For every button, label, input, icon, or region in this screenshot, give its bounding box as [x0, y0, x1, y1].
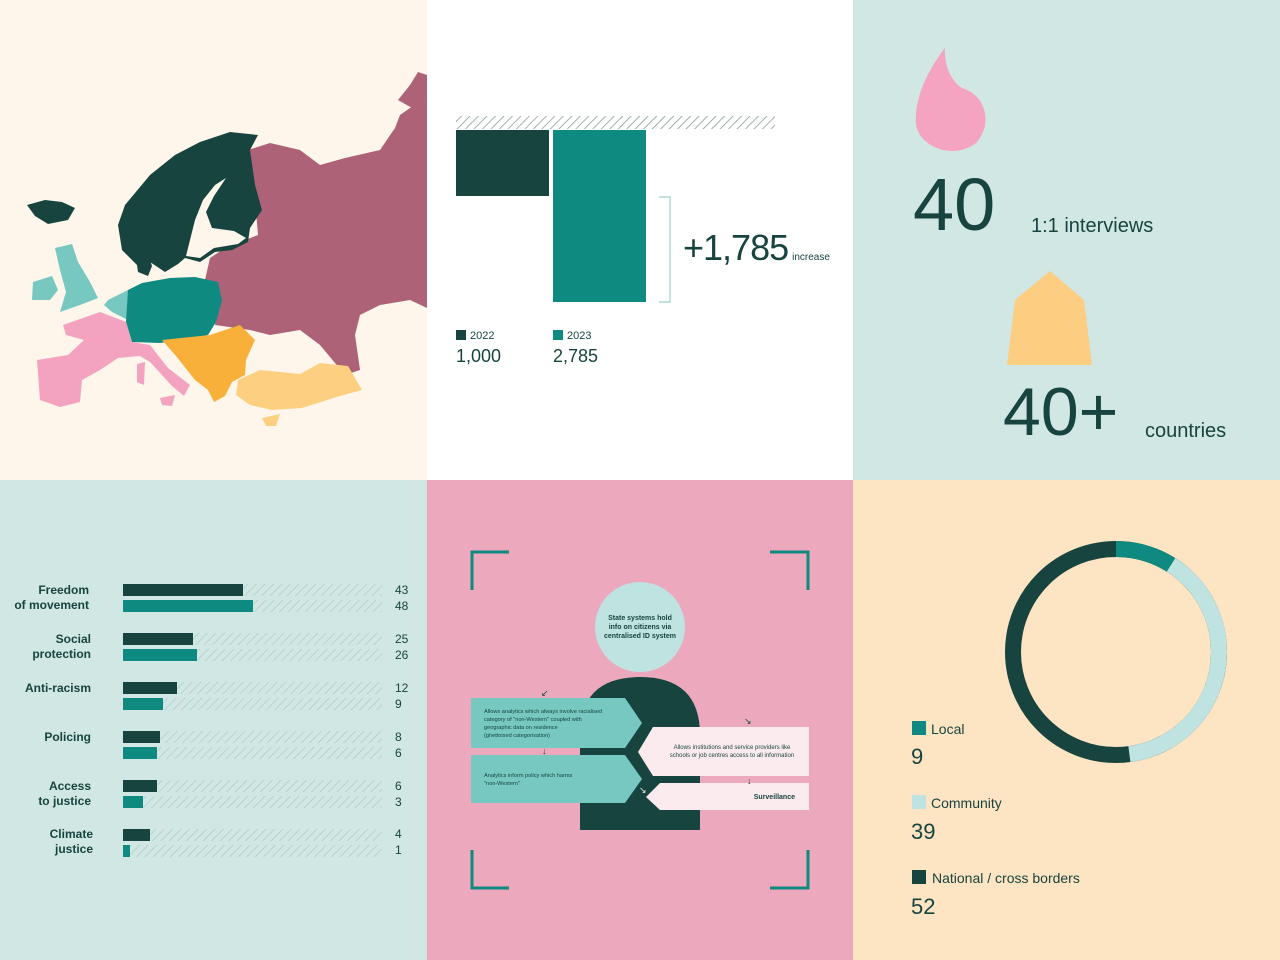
- panel: key stats: [853, 0, 1280, 480]
- row: freedom of movement: Freedom: [38, 583, 89, 597]
- row: access to justice: 6: [395, 779, 402, 793]
- panel: ID system diagram: [427, 480, 853, 960]
- legend: national: [911, 870, 1080, 919]
- icon: yellow house: [1007, 271, 1092, 365]
- row: freedom of movement: [14, 583, 409, 613]
- map: central europe: [126, 277, 222, 343]
- row: policing: 8: [395, 730, 402, 744]
- donut: [1013, 549, 1219, 755]
- bar 2022: [456, 130, 549, 196]
- row: anti-racism: Anti-racism: [25, 681, 91, 695]
- box: analytics racialised: [471, 698, 642, 748]
- legend: national: National / cross borders: [932, 870, 1080, 886]
- box: analytics racialised: (ghettoised categorisation): [484, 733, 550, 739]
- row: climate justice: 4: [395, 827, 402, 841]
- bracket: [659, 197, 670, 302]
- box: institutions access: Allows institutions and service providers like: [674, 745, 791, 751]
- row: access to justice: 3: [395, 795, 402, 809]
- box: analytics racialised: category of "non-Western" coupled with: [484, 717, 582, 723]
- row: policing: 6: [395, 746, 402, 760]
- row: anti-racism: [25, 681, 409, 711]
- legend: local: [911, 721, 964, 769]
- row: climate justice: [50, 827, 402, 857]
- stat: 40 interviews: [913, 163, 1153, 246]
- legend 2022: 2022: [470, 330, 494, 342]
- box: analytics racialised: geographic data on residence: [484, 725, 558, 731]
- hatched cap: [456, 116, 775, 129]
- head: state systems: State systems hold: [608, 615, 672, 622]
- row: climate justice: Climate: [50, 827, 93, 841]
- legend: national: 52: [911, 894, 935, 919]
- legend 2023: 2,785: [553, 346, 598, 366]
- icon: pink quote mark: [916, 48, 985, 151]
- arrows: ↘: [639, 785, 647, 795]
- panel: europe map: [0, 0, 427, 480]
- row: climate justice: justice: [54, 842, 93, 856]
- arrows: ↓: [747, 776, 752, 786]
- arrows: [541, 688, 752, 795]
- arrows: ↘: [744, 716, 752, 726]
- row: anti-racism: 9: [395, 697, 402, 711]
- box: institutions access: schools or job centres access to all information: [670, 753, 794, 759]
- box: analytics inform policy: Analytics inform policy which harms: [484, 773, 572, 779]
- legend 2023: 2023: [567, 330, 591, 342]
- box: analytics inform policy: [471, 755, 642, 803]
- row: social protection: [32, 632, 409, 662]
- row: access to justice: Access: [49, 779, 91, 793]
- map: russia/east region: [205, 100, 427, 375]
- row: social protection: 25: [395, 632, 409, 646]
- box: surveillance: [646, 783, 809, 810]
- head: state systems: [595, 582, 685, 672]
- panel: theme bar chart: [0, 480, 427, 960]
- row: access to justice: [38, 779, 402, 809]
- legend: community: Community: [931, 795, 1002, 811]
- stat: 40+ countries: [1003, 374, 1226, 450]
- panel: growth bar chart: [427, 0, 853, 480]
- figure body: [580, 677, 700, 830]
- row: climate justice: 1: [395, 843, 402, 857]
- row: social protection: protection: [32, 647, 91, 661]
- map: uk and ireland: [55, 244, 98, 312]
- row: anti-racism: 12: [395, 681, 409, 695]
- legend: local: 9: [911, 744, 923, 769]
- row: social protection: 26: [395, 648, 409, 662]
- map: balkans: [162, 325, 255, 402]
- row: freedom of movement: 43: [395, 583, 409, 597]
- map: nordic region: [118, 132, 262, 272]
- legend: community: 39: [911, 819, 935, 844]
- stat: 40 interviews: 40: [913, 163, 995, 246]
- row: policing: [44, 730, 402, 760]
- box: analytics inform policy: "non-Western": [484, 781, 520, 787]
- map: western/southern europe: [37, 312, 190, 407]
- row: social protection: Social: [56, 632, 91, 646]
- row: access to justice: to justice: [38, 794, 91, 808]
- row: policing: Policing: [44, 730, 91, 744]
- arrows: ↓: [542, 746, 546, 756]
- row: freedom of movement: 48: [395, 599, 409, 613]
- legend 2022: 1,000: [456, 346, 501, 366]
- corner brackets: [472, 552, 808, 888]
- box: surveillance: Surveillance: [754, 794, 795, 801]
- box: institutions access: [638, 727, 809, 776]
- map: turkey region: [236, 363, 362, 410]
- legend 2023: [553, 330, 598, 366]
- legend: community: [911, 795, 1002, 844]
- head: state systems: centralised ID system: [604, 633, 676, 640]
- legend 2022: [456, 330, 501, 366]
- arrows: ↙: [541, 688, 549, 698]
- stat: 40 interviews: 1:1 interviews: [1031, 215, 1153, 237]
- stat: 40+ countries: 40+: [1003, 374, 1118, 450]
- panel: donut chart: [853, 480, 1280, 960]
- legend: local: Local: [931, 721, 964, 737]
- head: state systems: info on citizens via: [609, 624, 671, 631]
- stat: 40+ countries: countries: [1145, 420, 1226, 442]
- box: analytics racialised: Allows analytics which always involve racialised: [484, 709, 602, 715]
- bar 2023: [553, 130, 646, 302]
- increase label: +1,785 increase: [683, 227, 830, 268]
- row: freedom of movement: of movement: [14, 598, 89, 612]
